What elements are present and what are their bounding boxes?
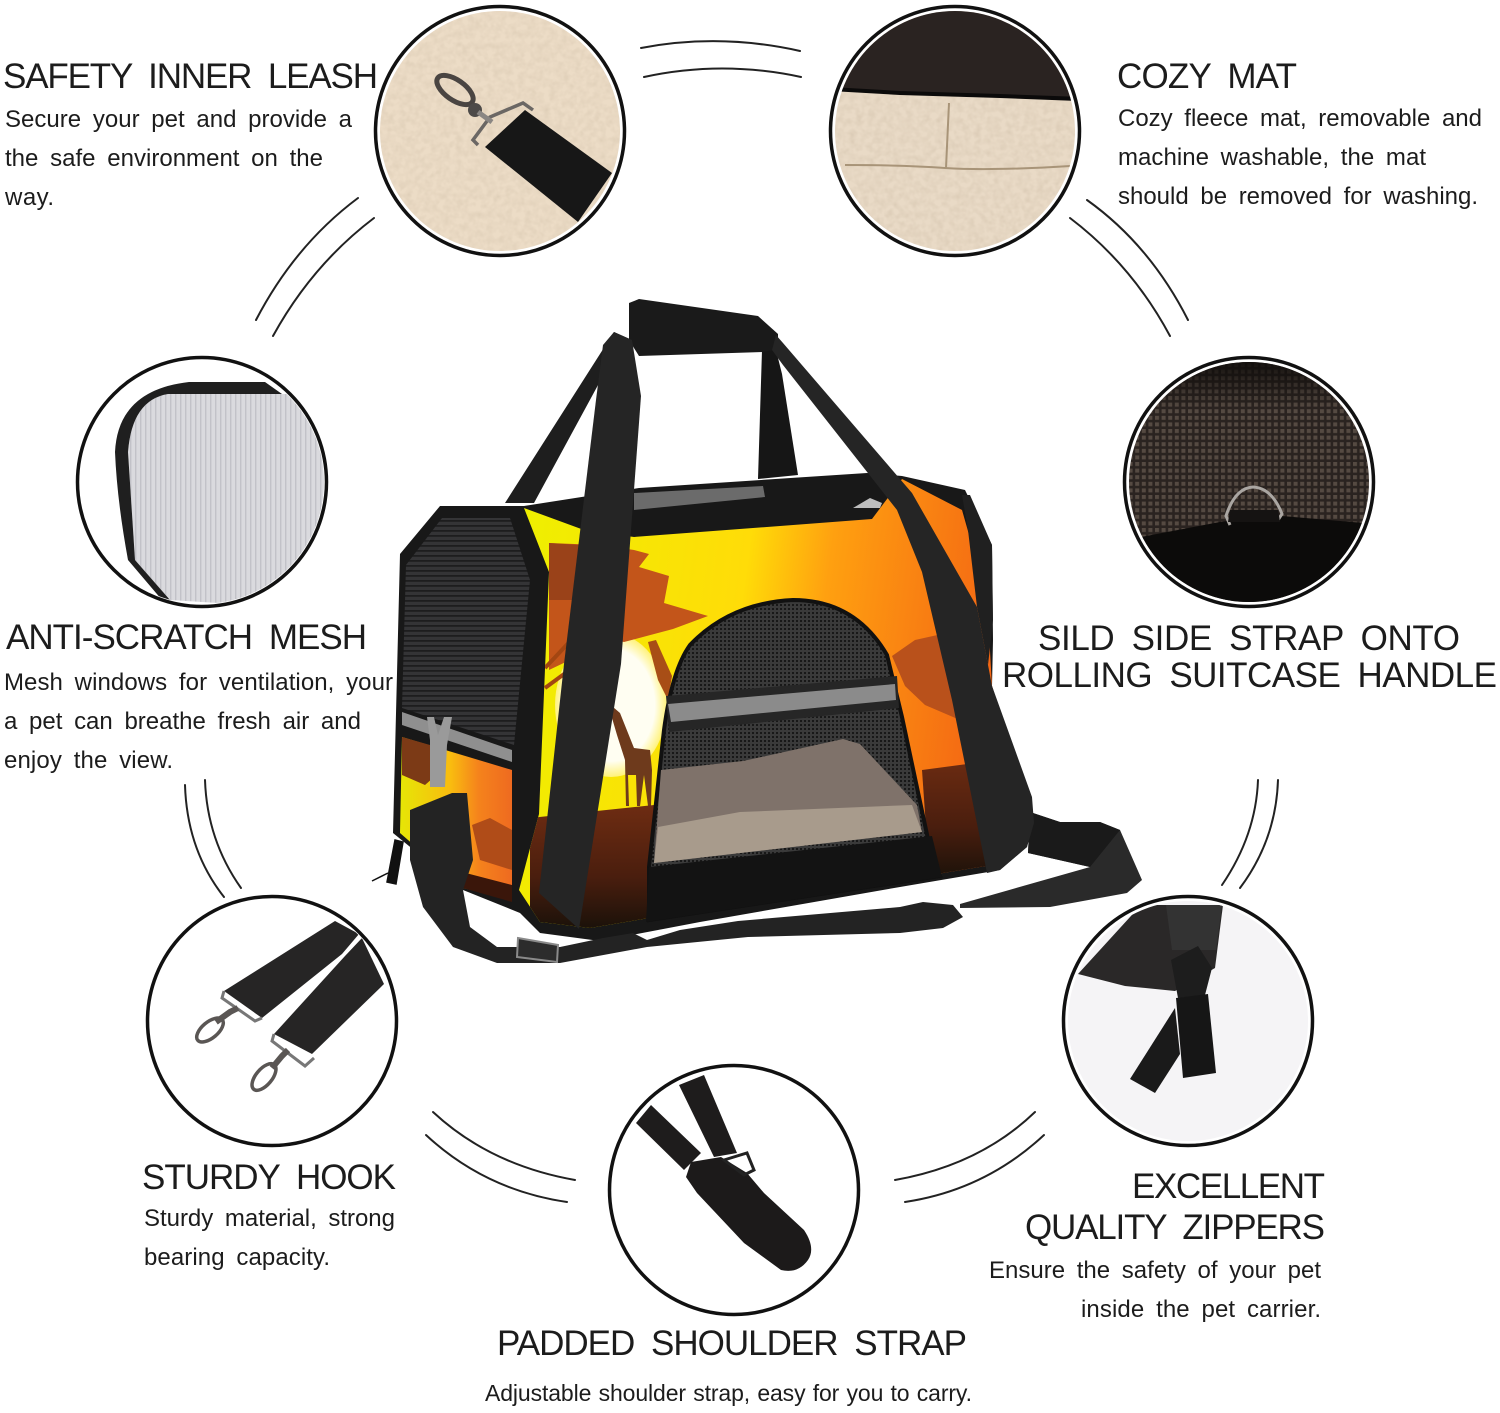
description: anti-scratch mesh: Mesh windows for ventilation, your xyxy=(4,669,393,696)
description: cozy mat: Cozy fleece mat, removable and xyxy=(1118,105,1482,132)
detail photo: fleece mat xyxy=(830,5,1080,257)
giraffe behind xyxy=(648,640,672,700)
description: cozy mat: should be removed for washing. xyxy=(1118,183,1478,210)
door base xyxy=(646,836,942,922)
description: safety inner leash: Secure your pet and provide a xyxy=(5,106,353,133)
description: safety inner leash: way. xyxy=(4,184,54,211)
heading: excellent quality zippers: EXCELLENT xyxy=(1132,1167,1325,1206)
detail photo: anti-scratch mesh xyxy=(78,358,330,610)
description: zippers: inside the pet carrier. xyxy=(1081,1296,1321,1323)
side zipper pull xyxy=(372,840,403,884)
side hook xyxy=(427,717,452,787)
back strap of handle xyxy=(758,350,798,479)
decorative arcs: bottom right xyxy=(895,1112,1044,1202)
left diagonal handle strap xyxy=(505,332,632,503)
decorative arcs: bottom left xyxy=(426,1112,575,1202)
right long strap xyxy=(772,335,1034,873)
side reflective stripe xyxy=(402,712,512,762)
mesh front door xyxy=(646,600,942,922)
panel: side strap text: SILD SIDE STRAP ONTO xyxy=(1038,619,1460,658)
right shoulder strap loop xyxy=(960,812,1142,908)
description: cozy mat xyxy=(1118,105,1482,210)
decorative arcs: top right xyxy=(1070,200,1188,336)
right trees xyxy=(892,634,960,720)
heading: anti-scratch mesh: ANTI-SCRATCH MESH xyxy=(6,618,367,657)
heading: padded shoulder strap: PADDED SHOULDER STRAP xyxy=(497,1324,967,1363)
strap buckle xyxy=(517,938,558,962)
panel: safety inner leash text xyxy=(3,57,378,211)
panel: side strap text: ROLLING SUITCASE HANDLE xyxy=(1002,656,1497,695)
ground right xyxy=(922,764,986,874)
reflective stripe xyxy=(666,676,899,732)
top mesh vent xyxy=(634,486,882,510)
description: safety inner leash xyxy=(4,106,353,211)
panel: sturdy hook text xyxy=(142,1158,396,1271)
bag body base xyxy=(393,473,1032,941)
decorative arcs: top xyxy=(641,41,801,77)
panel: cozy mat text xyxy=(1117,57,1482,210)
heading: cozy mat: COZY MAT xyxy=(1117,57,1297,96)
description: anti-scratch mesh: enjoy the view. xyxy=(4,747,173,774)
cushion seen through door xyxy=(654,739,922,863)
heading: sturdy hook: STURDY HOOK xyxy=(142,1158,396,1197)
detail photo: inner leash on fleece xyxy=(375,5,625,257)
giraffe xyxy=(612,708,652,806)
heading: excellent quality zippers: QUALITY ZIPPERS xyxy=(1025,1208,1325,1247)
description: zippers: Ensure the safety of your pet xyxy=(989,1257,1321,1284)
description: cozy mat: machine washable, the mat xyxy=(1118,144,1426,171)
printed front panel xyxy=(519,479,994,928)
heading: excellent quality zippers xyxy=(1025,1167,1325,1247)
panel: excellent quality zippers text xyxy=(989,1167,1325,1323)
heading: safety inner leash: SAFETY INNER LEASH xyxy=(3,57,378,96)
description: padded shoulder strap: Adjustable shoulder strap, easy for you to carry. xyxy=(485,1380,972,1406)
detail photo: sturdy hook strap xyxy=(148,896,396,1146)
main product: pet carrier bag xyxy=(372,299,1142,963)
detail photo: d-ring inside xyxy=(1124,358,1375,610)
detail photo: zipper xyxy=(1064,896,1312,1146)
description: sturdy hook: Sturdy material, strong xyxy=(144,1205,395,1232)
description: anti-scratch mesh: a pet can breathe fresh air and xyxy=(4,708,361,735)
decorative arcs: top left xyxy=(256,198,374,336)
panel: anti-scratch mesh text xyxy=(4,618,393,774)
panel: padded shoulder strap text xyxy=(485,1324,972,1406)
ground left xyxy=(530,805,654,935)
decorative arcs: left xyxy=(185,780,241,897)
decorative arcs: right xyxy=(1222,780,1278,888)
description: safety inner leash: the safe environment on the xyxy=(5,145,323,172)
side print xyxy=(400,737,512,900)
side mesh panel xyxy=(372,518,530,902)
panel: side strap text xyxy=(1002,619,1497,695)
right bag edge xyxy=(962,495,993,665)
description: anti-scratch mesh xyxy=(4,669,393,774)
detail photo: padded shoulder strap xyxy=(610,1066,858,1314)
handle grip xyxy=(629,299,778,356)
shoulder strap front xyxy=(410,793,963,963)
acacia tree left xyxy=(549,543,708,670)
front long strap xyxy=(539,332,641,929)
sun xyxy=(555,633,667,777)
description: sturdy hook xyxy=(144,1205,395,1271)
description: zippers xyxy=(989,1257,1321,1323)
description: sturdy hook: bearing capacity. xyxy=(144,1244,330,1271)
